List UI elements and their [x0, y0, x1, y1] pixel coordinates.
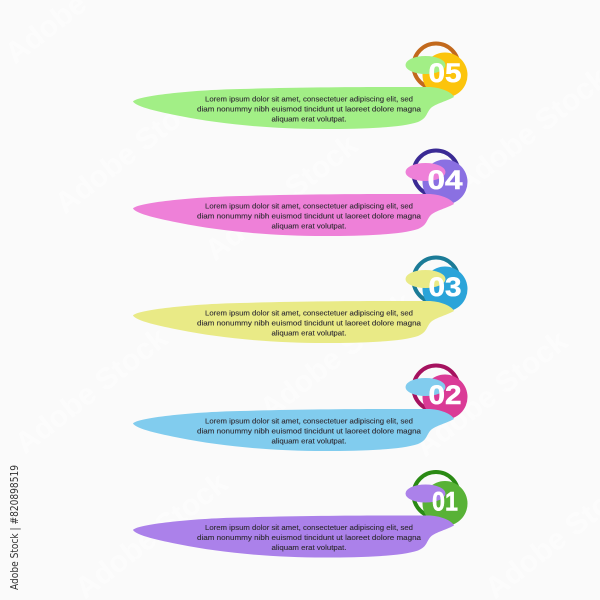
- badge 02: [422, 374, 468, 420]
- text 02: [197, 416, 422, 446]
- text 04: aliquam erat volutpat.: [272, 222, 346, 230]
- blob 04: [406, 163, 446, 181]
- number 02: 02: [428, 380, 462, 410]
- number 05: 05: [428, 58, 462, 88]
- ring 03: [414, 258, 458, 302]
- text 05: Lorem ipsum dolor sit amet, consectetuer adipiscing elit, sed: [205, 94, 413, 104]
- text 01: [197, 523, 422, 552]
- text: Adobe Stock: [49, 81, 214, 221]
- ring 04: [414, 150, 458, 196]
- number 03: 03: [428, 272, 462, 302]
- step 03: [133, 258, 468, 343]
- text 01: aliquam erat volutpat.: [272, 543, 346, 552]
- text 03: aliquam erat volutpat.: [272, 328, 346, 338]
- banner 04: [133, 194, 454, 236]
- blob 05: [406, 56, 446, 74]
- text 04: diam nonummy nibh euismod tincidunt ut laoreet dolore magna: [197, 212, 422, 220]
- banner 03: [133, 301, 454, 343]
- text 05: [197, 94, 422, 124]
- text 05: aliquam erat volutpat.: [272, 114, 346, 124]
- ring 05: [414, 44, 458, 88]
- text: Adobe Stock: [254, 286, 419, 426]
- badge 05: [422, 52, 468, 98]
- step 02: [133, 366, 468, 451]
- text 01: diam nonummy nibh euismod tincidunt ut laoreet dolore magna: [197, 533, 422, 542]
- blob 01: [406, 484, 446, 502]
- blob 02: [406, 378, 446, 396]
- text: Adobe Stock: [9, 321, 174, 461]
- badge 04: [422, 160, 468, 204]
- text 05: diam nonummy nibh euismod tincidunt ut laoreet dolore magna: [197, 104, 422, 114]
- text: Adobe Stock: [199, 128, 364, 268]
- step 01: [133, 472, 468, 558]
- badge 03: [422, 266, 468, 312]
- banner 02: [133, 409, 454, 451]
- text 04: [197, 202, 422, 230]
- stock id caption: Adobe Stock | #820898519: [9, 465, 21, 590]
- ring 01: [414, 472, 458, 517]
- number 01: 01: [432, 486, 458, 516]
- text: Adobe Stock: [409, 324, 574, 464]
- text 03: diam nonummy nibh euismod tincidunt ut laoreet dolore magna: [197, 318, 422, 328]
- text 04: Lorem ipsum dolor sit amet, consectetuer adipiscing elit, sed: [205, 202, 413, 210]
- step 05: [133, 44, 468, 129]
- step 04: [133, 150, 468, 236]
- badge 01: [422, 481, 468, 526]
- text 02: Lorem ipsum dolor sit amet, consectetuer adipiscing elit, sed: [205, 416, 413, 426]
- text 03: Lorem ipsum dolor sit amet, consectetuer adipiscing elit, sed: [205, 308, 413, 318]
- banner 05: [133, 87, 454, 129]
- text 01: Lorem ipsum dolor sit amet, consectetuer adipiscing elit, sed: [205, 523, 413, 532]
- number 04: 04: [428, 165, 462, 195]
- text 03: [197, 308, 422, 338]
- ring 02: [414, 366, 458, 410]
- text 02: diam nonummy nibh euismod tincidunt ut laoreet dolore magna: [197, 426, 422, 436]
- banner 01: [133, 516, 454, 558]
- blob 03: [406, 270, 446, 288]
- text 02: aliquam erat volutpat.: [272, 436, 346, 446]
